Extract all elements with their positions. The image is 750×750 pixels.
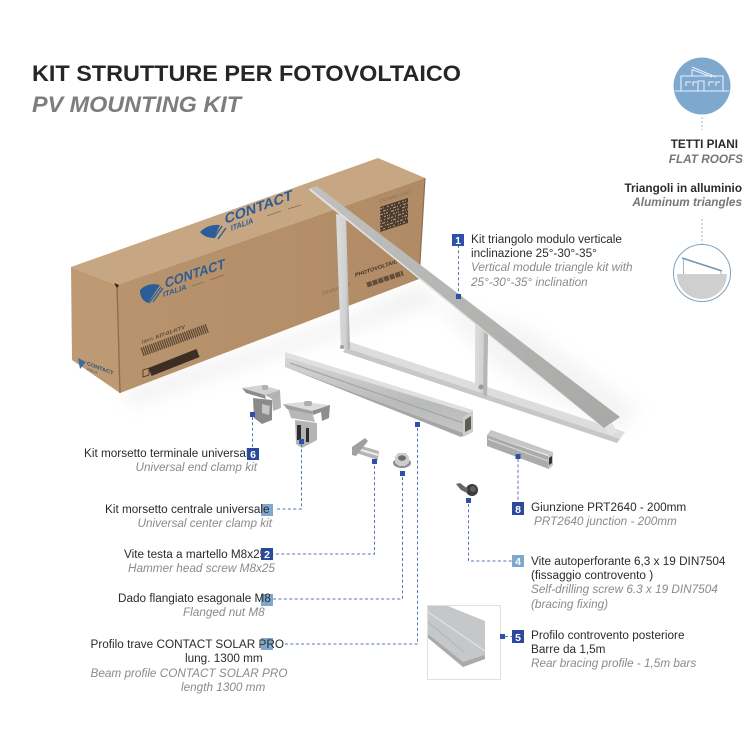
connector: triangle icon to label [701,219,703,244]
icon: triangle on roof [674,244,730,302]
beam rail profile [285,352,473,437]
box code and barcode: Item: KIT-01-KTV [142,325,185,346]
bracing profile photo [428,606,500,680]
middle strut [475,323,488,397]
label 1: triangle kit: Kit triangolo modulo verticale [471,233,622,246]
label 2: hammer screw: Vite testa a martello M8x25 [124,548,267,561]
end clamp [242,385,281,424]
label: aluminum triangles: Triangoli in alluminio [624,182,742,195]
hammer head screw [352,438,379,460]
label 6: end clamp: 6 [250,449,256,461]
label 2: hammer screw: 2 [264,549,270,561]
box QR code: DOWNLOAD [380,189,411,205]
center clamp [283,401,330,448]
box side label [322,259,403,297]
label: aluminum triangles [624,182,742,209]
label 3: flanged nut: Dado flangiato esagonale M8 [118,592,271,605]
box end logo: ITALIA [87,367,98,375]
label: flat roofs [669,138,743,166]
label 4: self-drilling screw: (fissaggio controvento ) [531,569,653,582]
label 5: bracing profile: 5 [515,632,521,644]
label: flat roofs: TETTI PIANI [671,138,738,151]
label 6: end clamp: Universal end clamp kit [136,461,258,474]
label 1: triangle kit: 25°-30°-35° inclination [470,276,588,289]
label 4: self-drilling screw: (bracing fixing) [531,598,608,611]
junction profile [487,430,553,469]
label 3: flanged nut [118,471,405,619]
title: KIT STRUTTURE PER FOTOVOLTAICO [32,61,461,86]
label 5: bracing profile: Profilo controvento posteriore [531,629,685,642]
box end face [71,267,120,393]
self-drilling screw [456,483,478,496]
box top logo [200,186,301,239]
box top face [71,158,425,285]
label 2: hammer screw: Hammer head screw M8x25 [128,562,275,575]
box side label: PHOTOVOLTAIC [355,259,398,279]
label 5: bracing profile [500,629,696,670]
label 9: beam profile: lung. 1300 mm [185,652,263,665]
label 1: triangle kit [452,233,633,299]
front strut [336,214,350,349]
label 7: center clamp: Kit morsetto centrale universale [105,503,270,516]
box end logo: CONTACT [87,361,114,377]
label 7: center clamp: Universal center clamp kit [138,517,273,530]
box top logo: CONTACT [225,186,293,227]
label 3: flanged nut: Flanged nut M8 [183,606,265,619]
flanged nut [393,453,411,468]
box long face [117,178,425,393]
title [32,61,461,117]
top beam [310,186,620,428]
label 5: bracing profile: Barre da 1,5m [531,643,606,656]
base bar [343,342,625,443]
box code and barcode [142,325,208,377]
label 4: self-drilling screw: Self-drilling screw 6.3 x 19 DIN7504 [531,583,718,596]
label 1: triangle kit: 1 [455,235,461,247]
label 8: junction: 8 [515,504,521,516]
label 8: junction [512,454,686,528]
label 8: junction: Giunzione PRT2640 - 200mm [531,501,686,514]
label 9: beam profile: length 1300 mm [181,681,265,694]
label 6: end clamp: Kit morsetto terminale universale [84,447,256,460]
label 1: triangle kit: Vertical module triangle kit with [471,261,633,274]
box side logo: ITALIA [163,282,187,299]
label 2: hammer screw [124,459,377,575]
label 6: end clamp [84,412,259,474]
soft floor shadows [125,285,640,430]
label 9: beam profile [90,422,420,694]
box end logo [78,358,114,377]
box side logo: CONTACT [165,256,225,292]
label 5: bracing profile: Rear bracing profile - 1,5m bars [531,657,696,670]
label 4: self-drilling screw: Vite autoperforante 6,3 x 19 DIN7504 [531,555,726,568]
label 7: center clamp [105,439,304,530]
connector: roof icon to label [701,117,703,130]
title: PV MOUNTING KIT [32,92,243,117]
label 9: beam profile: Beam profile CONTACT SOLAR PRO [90,667,287,680]
label 4: self-drilling screw: 4 [515,556,521,568]
label 8: junction: PRT2640 junction - 200mm [534,515,677,528]
box top logo: ITALIA [231,216,254,233]
label 1: triangle kit: inclinazione 25°-30°-35° [471,247,597,260]
icon: flat roof building [674,58,730,114]
label: flat roofs: FLAT ROOFS [669,153,743,166]
product box [71,158,425,393]
box side label: Struttura per [322,282,351,297]
label 9: beam profile: Profilo trave CONTACT SOLAR PRO [90,638,284,651]
label: aluminum triangles: Aluminum triangles [631,196,742,209]
triangle frame [309,186,625,443]
label 4: self-drilling screw [466,498,726,611]
box side logo [140,256,225,303]
box QR code [380,189,411,232]
